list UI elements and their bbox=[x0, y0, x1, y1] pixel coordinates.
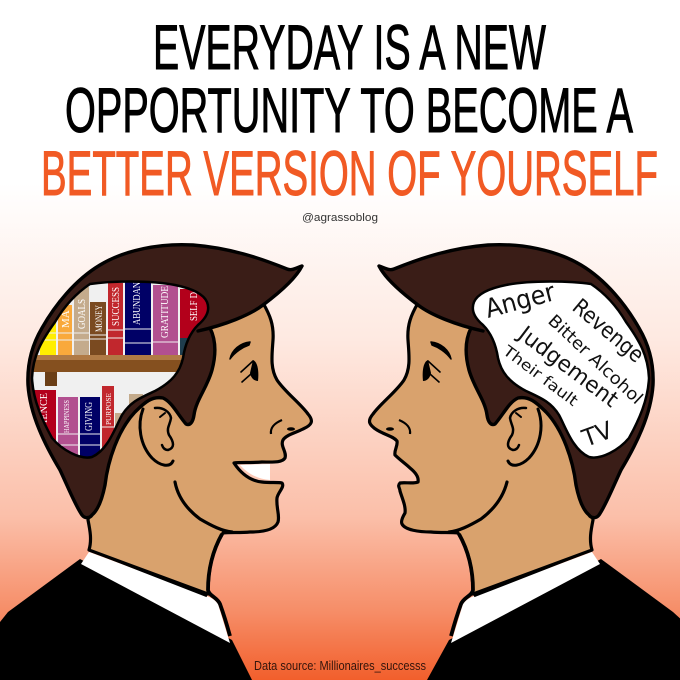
right jaw line bbox=[449, 482, 507, 532]
right ear bbox=[508, 408, 541, 465]
right eyebrow bbox=[431, 342, 451, 359]
negative thoughts words: Judgement bbox=[512, 321, 623, 413]
right neck outline bbox=[451, 534, 473, 636]
books: bottom shelf: PURPOSE bbox=[104, 393, 113, 425]
books: top shelf: SUCCESS bbox=[110, 287, 122, 326]
right nose details bbox=[386, 420, 410, 434]
books: bottom shelf: GIVING bbox=[84, 402, 95, 431]
negative thoughts words: Revenge bbox=[567, 294, 648, 368]
left jaw line bbox=[175, 482, 232, 532]
right hair bbox=[379, 245, 653, 518]
books: top shelf: SELF D bbox=[188, 292, 200, 321]
books: bottom shelf: HAPPINESS bbox=[63, 400, 71, 433]
bookshelf window outline bbox=[32, 282, 208, 458]
books: top shelf: GOALS bbox=[76, 299, 88, 329]
data source: Data source: Millionaires_successs bbox=[254, 658, 426, 673]
left nose details bbox=[271, 420, 295, 434]
left collar edge bbox=[89, 550, 207, 596]
left ear bbox=[140, 408, 173, 465]
title bbox=[41, 13, 658, 209]
books: top shelf: MONEY bbox=[94, 305, 104, 332]
books: top shelf: MA bbox=[60, 310, 72, 328]
left hair bbox=[28, 245, 302, 518]
right eye bbox=[423, 360, 440, 382]
right man: open mouth, head full of negative words bbox=[370, 245, 680, 680]
right collar bbox=[451, 552, 600, 643]
left eyebrow bbox=[230, 342, 250, 359]
books: top shelf bbox=[40, 280, 210, 355]
bookshelf window bbox=[33, 282, 207, 456]
handle: @agrassoblog bbox=[302, 212, 378, 224]
books: top shelf: GRATITUDE bbox=[159, 286, 171, 338]
negative thoughts words: Their fault bbox=[499, 341, 582, 410]
right face and neck bbox=[370, 303, 593, 594]
negative thoughts words: Anger bbox=[482, 277, 559, 325]
shelf bbox=[25, 355, 185, 386]
books: top shelf: ABUNDAN bbox=[132, 282, 143, 325]
right collar edge bbox=[474, 550, 592, 596]
left suit bbox=[0, 559, 252, 680]
left face and neck bbox=[88, 303, 311, 594]
negative thoughts words bbox=[482, 277, 648, 453]
left neck outline bbox=[208, 534, 230, 636]
right suit bbox=[427, 559, 680, 680]
right thought window bbox=[473, 282, 649, 458]
left eye bbox=[241, 360, 258, 382]
left collar bbox=[81, 552, 230, 643]
negative thoughts words: Bitter Alcohol bbox=[544, 311, 646, 409]
books: bottom shelf bbox=[34, 386, 143, 456]
left man: smiling, head full of books bbox=[0, 245, 311, 680]
negative thoughts words: TV bbox=[578, 416, 617, 453]
books: bottom shelf: IENCE bbox=[38, 393, 50, 423]
smile teeth bbox=[240, 464, 270, 480]
